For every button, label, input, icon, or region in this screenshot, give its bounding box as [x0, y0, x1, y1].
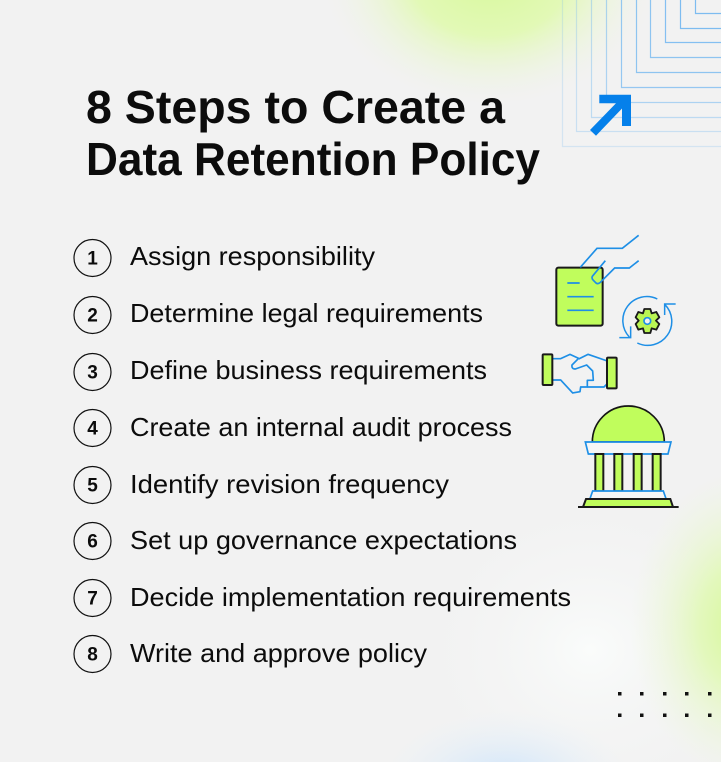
step 3 — [74, 354, 487, 390]
step 4: Create an internal audit process — [130, 412, 512, 442]
step 5: 5 — [87, 476, 98, 496]
step 7: Decide implementation requirements — [130, 582, 571, 612]
step list — [74, 240, 571, 672]
icon: government building — [578, 406, 679, 507]
step 6: 6 — [87, 532, 98, 552]
decorative nested corner grid — [562, 0, 721, 146]
step 1 — [74, 240, 375, 276]
icon: blue arrow — [590, 95, 631, 136]
step 1: Assign responsibility — [130, 241, 375, 271]
step 7: 7 — [87, 588, 98, 610]
step 2: Determine legal requirements — [130, 298, 483, 328]
step 5 — [74, 466, 449, 504]
title: Data Retention Policy — [86, 133, 540, 185]
step 4 — [74, 410, 512, 446]
icon: gear with rotating arrows — [619, 297, 676, 345]
step 8: Write and approve policy — [130, 638, 427, 668]
title: 8 Steps to Create a — [86, 81, 505, 133]
step 8: 8 — [87, 644, 98, 666]
decorative dot grid — [618, 692, 712, 717]
step 4: 4 — [87, 418, 98, 440]
step 3: 3 — [87, 362, 98, 384]
step 7 — [74, 580, 571, 616]
step 5: Identify revision frequency — [130, 469, 449, 499]
step 3: Define business requirements — [130, 355, 487, 385]
step 6: Set up governance expectations — [130, 525, 517, 555]
step 2: 2 — [87, 306, 98, 326]
icon: hand holding document — [556, 235, 639, 326]
icon: handshake — [543, 354, 617, 393]
title — [86, 81, 540, 185]
step 1: 1 — [87, 248, 98, 270]
step 8 — [74, 636, 427, 672]
step 2 — [74, 296, 483, 334]
step 6 — [74, 522, 517, 560]
